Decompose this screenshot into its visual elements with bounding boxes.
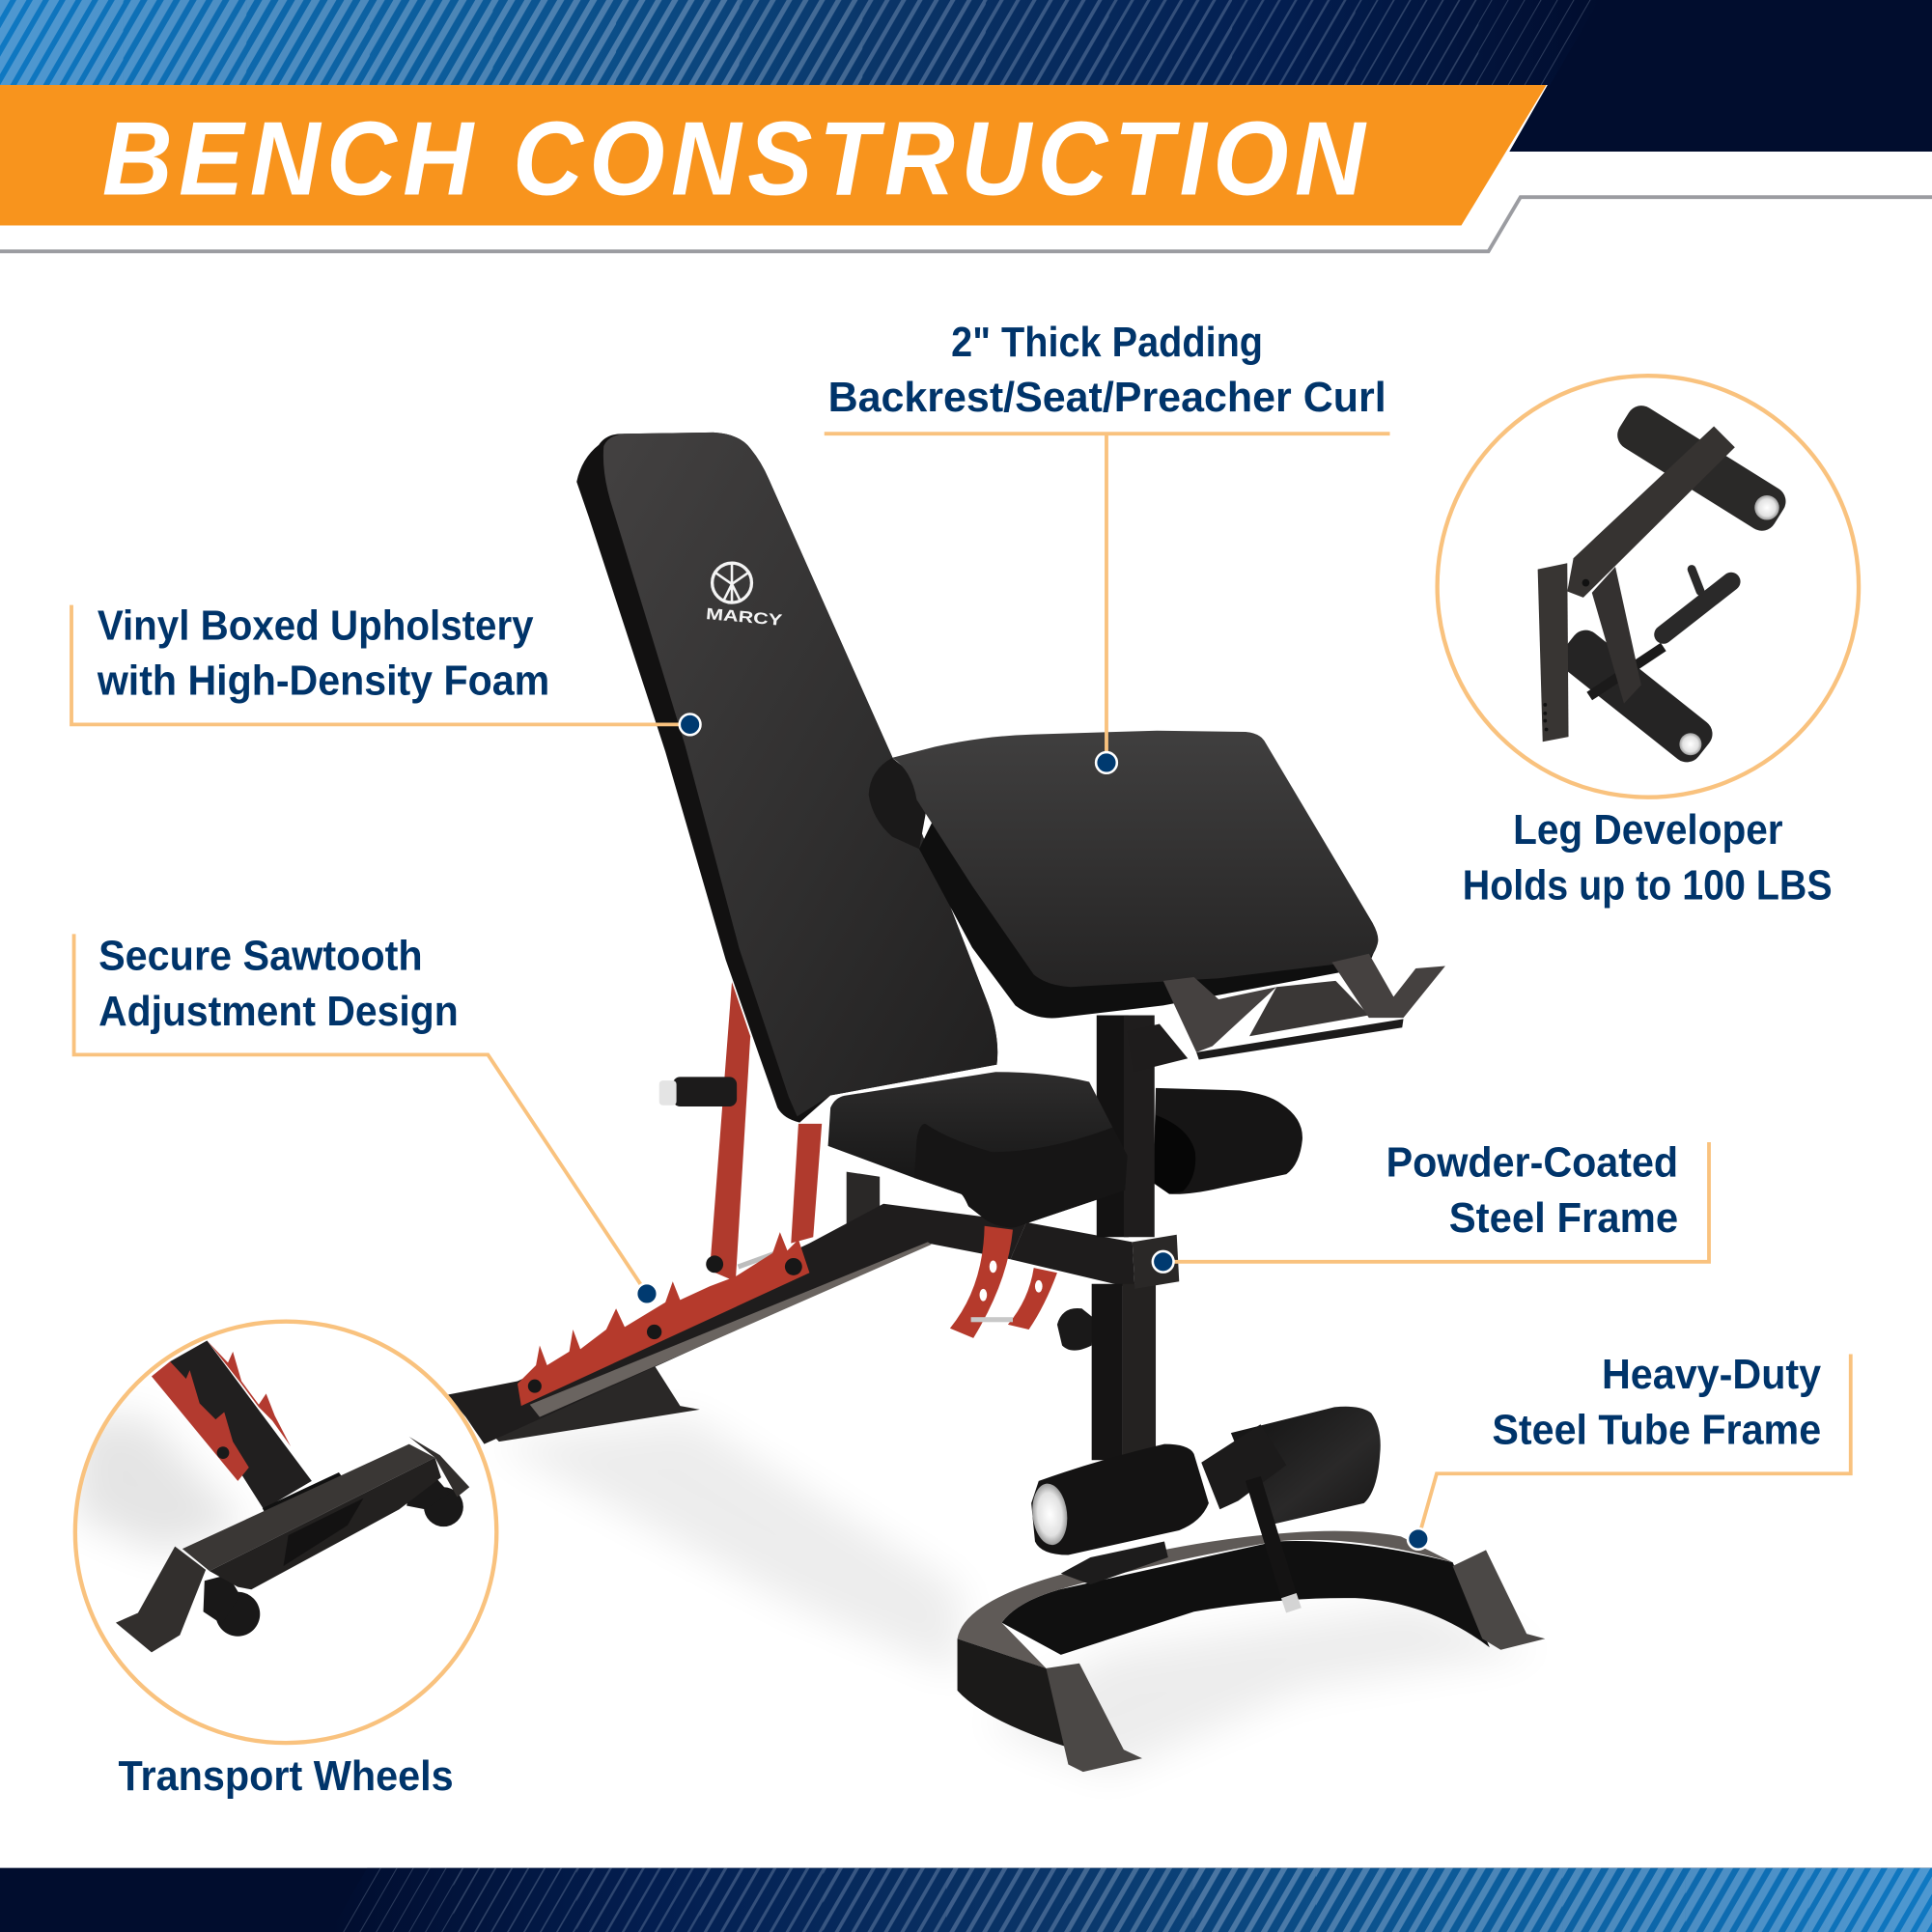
title: BENCH CONSTRUCTION bbox=[102, 100, 1367, 217]
inset circle: transport wheels bbox=[74, 1322, 496, 1743]
handle pin bbox=[1692, 570, 1700, 592]
adjustment peg bbox=[659, 1077, 737, 1106]
leg lever bbox=[1253, 1478, 1294, 1610]
label: Vinyl Boxed Upholstery bbox=[98, 602, 534, 649]
seat support post bbox=[847, 1172, 880, 1239]
crossbar top bbox=[182, 1444, 434, 1571]
base feet bbox=[1046, 1550, 1545, 1772]
horizontal seat tube bbox=[1010, 1222, 1134, 1289]
seat cushion bbox=[828, 1072, 1128, 1227]
adjuster brackets bbox=[950, 1226, 1057, 1338]
navy corner block bbox=[1478, 0, 1932, 152]
chrome cross rod bbox=[738, 1249, 781, 1269]
knob bbox=[1057, 1308, 1094, 1351]
red back struts bbox=[710, 982, 822, 1281]
label: Leg Developer bbox=[1513, 807, 1783, 854]
post holes bbox=[1543, 703, 1548, 731]
red left rail bbox=[152, 1361, 249, 1481]
plate bbox=[284, 1498, 363, 1566]
lever pivot bbox=[1061, 1541, 1168, 1584]
seat rear roll bbox=[1153, 1088, 1302, 1194]
callout: steel tube frame bbox=[1408, 1352, 1851, 1550]
label line 2: Steel Frame bbox=[1449, 1195, 1678, 1242]
label line 2: with High-Density Foam bbox=[97, 658, 549, 705]
dot bbox=[680, 714, 700, 735]
bottom stripe band bbox=[0, 1868, 1932, 1932]
beam underside highlight bbox=[530, 1242, 932, 1417]
crossbar front bbox=[210, 1458, 441, 1589]
caption: leg developer bbox=[1463, 807, 1833, 910]
ring stroke bbox=[75, 1322, 496, 1743]
black beam bbox=[170, 1340, 312, 1509]
preacher roll end bbox=[869, 758, 930, 849]
dot bbox=[1153, 1251, 1174, 1273]
seat front panel bbox=[914, 1124, 1128, 1227]
label line 2: Adjustment Design bbox=[98, 989, 459, 1035]
ring bbox=[75, 1322, 496, 1743]
Marcy logo bbox=[705, 563, 783, 630]
roll inner end bbox=[1153, 1115, 1195, 1194]
label: Heavy-Duty bbox=[1602, 1352, 1821, 1398]
curved base bbox=[958, 1531, 1490, 1752]
left end foot bbox=[116, 1547, 206, 1652]
leg developer rolls bbox=[1029, 1407, 1381, 1554]
mount plate bbox=[263, 1472, 343, 1513]
leader drop bbox=[1105, 434, 1107, 763]
top stripe band bbox=[0, 0, 1602, 86]
callout: sawtooth bbox=[74, 933, 658, 1304]
wheel right bbox=[406, 1479, 463, 1527]
bracket holes bbox=[980, 1260, 1043, 1302]
preacher arm bracket bbox=[1128, 1023, 1188, 1072]
label: Secure Sawtooth bbox=[98, 933, 423, 979]
wheel left bbox=[204, 1575, 260, 1637]
leader bbox=[825, 433, 1389, 435]
elbow tray bbox=[1163, 954, 1445, 1059]
pivot bolt bbox=[1582, 579, 1589, 586]
adjuster bar bbox=[971, 1317, 1013, 1322]
caption: transport wheels: Transport Wheels bbox=[119, 1753, 454, 1800]
collar block bbox=[1133, 1235, 1179, 1289]
label: Powder-Coated bbox=[1386, 1140, 1678, 1187]
header rule bbox=[0, 197, 1932, 251]
label line 2: Steel Tube Frame bbox=[1492, 1408, 1821, 1454]
leader bbox=[74, 934, 647, 1294]
rail bolt bbox=[217, 1446, 229, 1459]
header band bbox=[0, 0, 1932, 251]
Marcy logo: MARCY bbox=[705, 604, 783, 630]
dot bbox=[636, 1283, 658, 1304]
ring bbox=[1438, 376, 1859, 798]
bench floor shadows bbox=[492, 1417, 1540, 1775]
backrest pad bbox=[576, 433, 997, 1123]
preacher underside bbox=[919, 813, 1378, 1018]
main sloped beam bbox=[447, 1204, 1026, 1444]
label line 2: Holds up to 100 LBS bbox=[1463, 863, 1833, 910]
dot bbox=[1096, 752, 1117, 773]
rear foot wedge bbox=[459, 1365, 700, 1442]
callout: padding bbox=[825, 320, 1389, 773]
handle bbox=[1664, 581, 1731, 634]
leader bbox=[1418, 1354, 1851, 1539]
lower roll cap bbox=[1679, 733, 1701, 755]
preacher pad bbox=[892, 731, 1378, 987]
upper roll cap bbox=[1754, 495, 1779, 520]
lower roll bbox=[1554, 624, 1719, 769]
cross bar bbox=[1589, 647, 1664, 696]
leader bbox=[71, 605, 690, 724]
part shadow bbox=[74, 1417, 246, 1553]
bench photo illustration bbox=[447, 433, 1545, 1772]
leader bbox=[1163, 1142, 1709, 1262]
dot bbox=[1408, 1528, 1429, 1550]
arm bar bbox=[1567, 427, 1735, 598]
red right rail bbox=[207, 1340, 291, 1446]
diagonal leg bbox=[1592, 567, 1641, 704]
inset circle: leg developer bbox=[1438, 376, 1859, 798]
upper roll bbox=[1611, 400, 1791, 537]
clipped part bbox=[74, 1340, 469, 1652]
rail bolts bbox=[528, 1255, 802, 1393]
right end foot bbox=[409, 1437, 469, 1498]
upright post bbox=[1092, 1016, 1156, 1460]
label: 2" Thick Padding bbox=[951, 320, 1263, 366]
label line 2: Backrest/Seat/Preacher Curl bbox=[828, 375, 1386, 421]
red sawtooth rail bbox=[518, 1232, 809, 1406]
orange title banner bbox=[0, 85, 1547, 226]
callout: upholstery bbox=[71, 602, 700, 735]
roll bracket bbox=[1201, 1424, 1286, 1509]
callout: powder coated frame bbox=[1153, 1140, 1709, 1273]
post bbox=[1538, 563, 1569, 742]
